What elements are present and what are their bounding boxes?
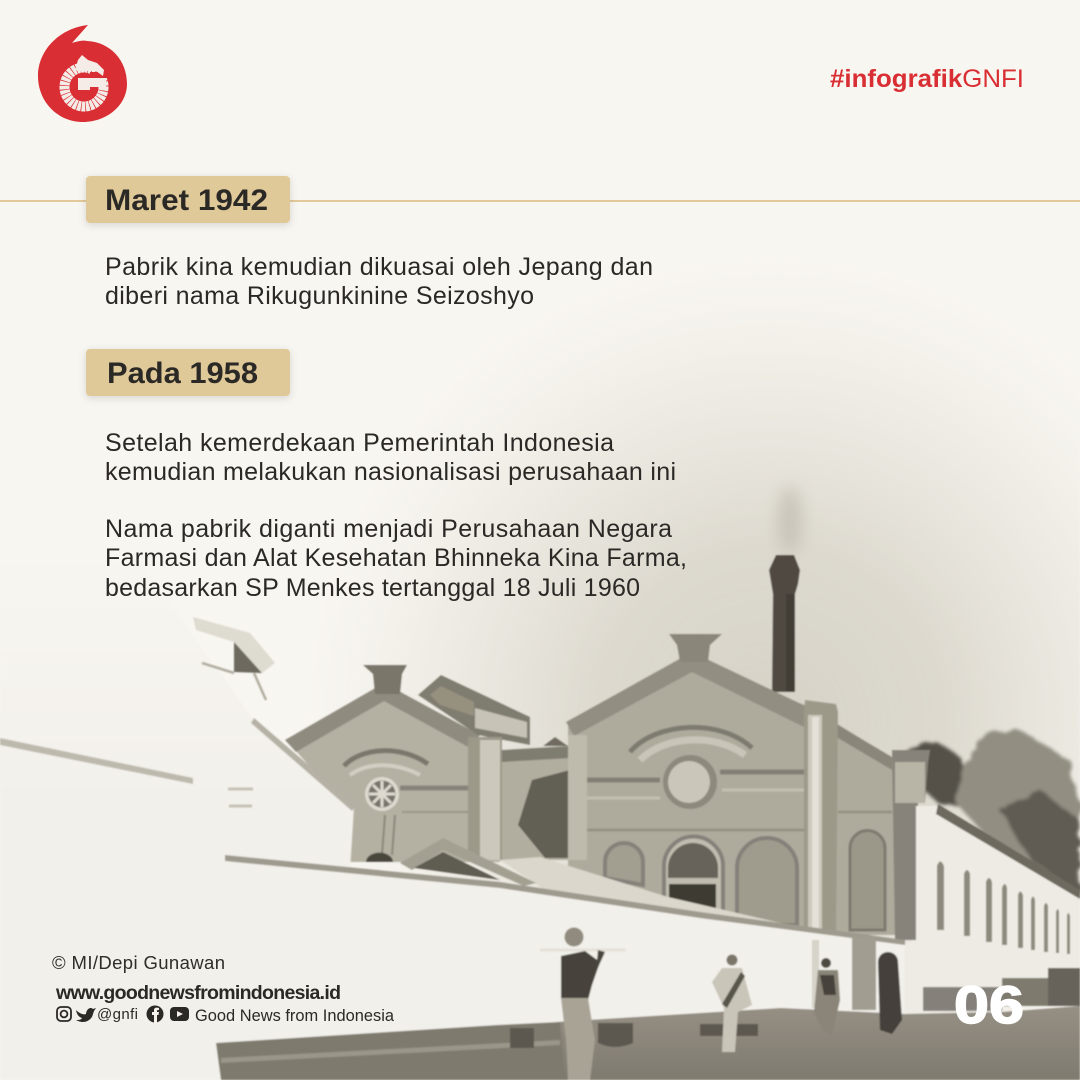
text: factory renamed: Farmasi dan Alat Kesehatan Bhinneka Kina Farma, xyxy=(105,544,687,572)
text: nationalisation: kemudian melakukan nasionalisasi perusahaan ini xyxy=(105,458,676,486)
channel name: Good News from Indonesia xyxy=(195,1006,395,1025)
trees xyxy=(905,728,1080,900)
icon: twitter xyxy=(76,1008,96,1022)
section: Pada 1958 xyxy=(86,349,687,602)
figures walking on the road xyxy=(540,928,902,1080)
text: Maret 1942 description xyxy=(105,253,653,310)
white left structures xyxy=(0,520,356,900)
text: nationalisation: Setelah kemerdekaan Pemerintah Indonesia xyxy=(105,429,614,457)
arched lettering xyxy=(630,727,752,752)
hashtag: #infografikGNFI xyxy=(830,65,1024,93)
chimney xyxy=(769,555,800,692)
handle: @gnfi xyxy=(97,1006,138,1023)
middle section xyxy=(502,737,570,860)
text: factory renamed: bedasarkan SP Menkes tertanggal 18 Juli 1960 xyxy=(105,574,640,602)
long white perimeter wall xyxy=(0,855,905,1080)
arched factory lettering xyxy=(344,751,428,766)
road and steps xyxy=(216,1006,1080,1080)
badge: Pada 1958: Pada 1958 xyxy=(107,357,258,390)
right gable building xyxy=(566,634,930,1008)
sloping roof and small gable xyxy=(400,838,900,944)
text: Maret 1942 description: diberi nama Rikugunkinine Seizoshyo xyxy=(105,282,534,310)
icon: instagram xyxy=(57,1007,71,1021)
badge: Maret 1942: Maret 1942 xyxy=(105,184,268,217)
page number: 06 xyxy=(954,976,1024,1035)
badge: Maret 1942 xyxy=(86,176,290,223)
arched windows xyxy=(605,830,885,930)
footer: website and social xyxy=(55,982,395,1025)
text: Maret 1942 description: Pabrik kina kemudian dikuasai oleh Jepang dan xyxy=(105,253,653,281)
red six mark xyxy=(38,25,127,122)
logo xyxy=(38,25,127,122)
section: Maret 1942 xyxy=(86,176,653,310)
horizontal string courses xyxy=(587,772,804,780)
badge: Pada 1958 xyxy=(86,349,290,396)
text: nationalisation xyxy=(105,429,676,486)
icon: facebook xyxy=(146,1006,164,1023)
divider line xyxy=(0,200,1080,202)
website url: www.goodnewsfromindonesia.id xyxy=(55,982,341,1004)
round window xyxy=(663,755,717,809)
long white side building xyxy=(905,804,1080,1014)
text: factory renamed: Nama pabrik diganti menjadi Perusahaan Negara xyxy=(105,515,672,543)
left gable building xyxy=(285,665,530,862)
text: factory renamed xyxy=(105,515,687,602)
white garuda G emblem xyxy=(64,55,112,106)
icon: youtube xyxy=(170,1007,189,1021)
rose window xyxy=(365,777,399,811)
photo credit: © MI/Depi Gunawan xyxy=(52,952,225,973)
